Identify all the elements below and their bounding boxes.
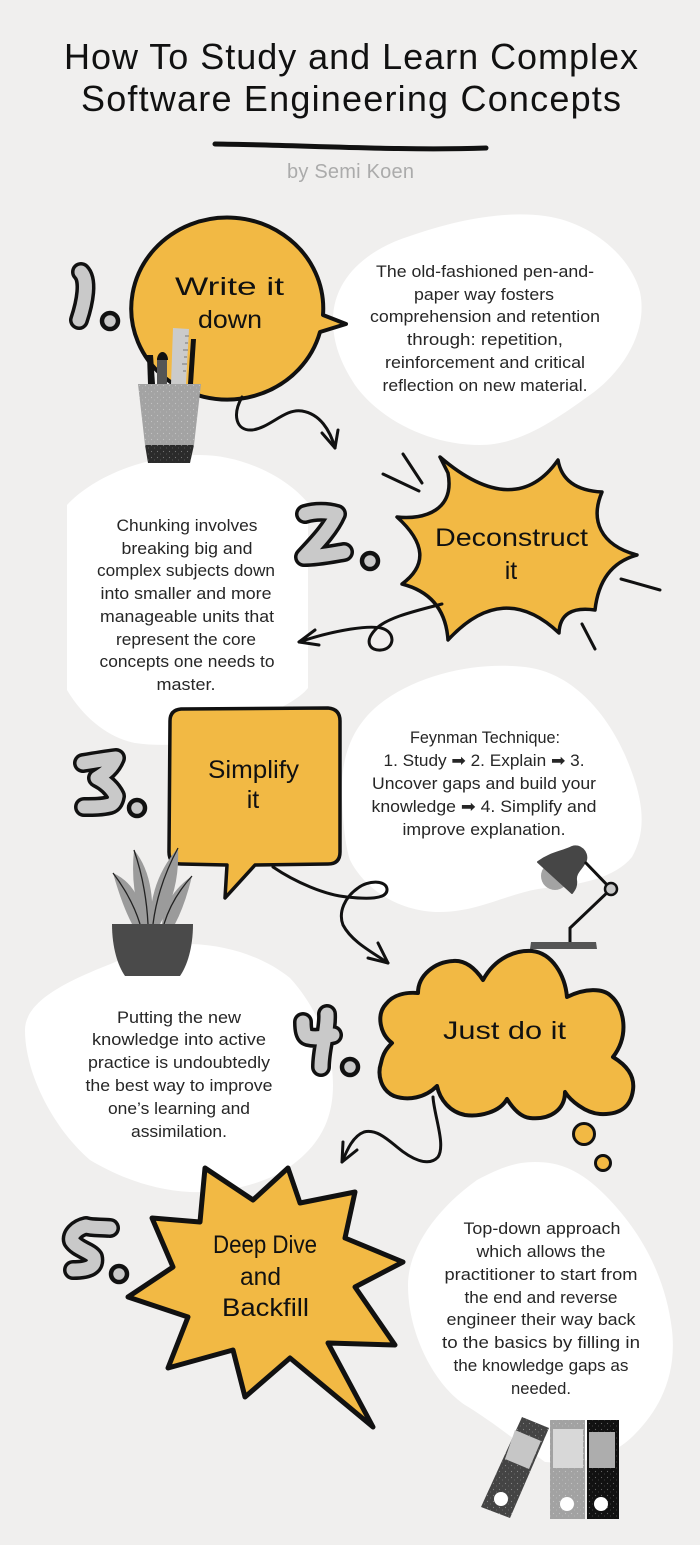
panel: step 4 description: Putting the new — [117, 1009, 241, 1027]
number 2 — [304, 512, 378, 569]
panel: step 5 description: to the basics by filling in — [442, 1334, 640, 1352]
arrow: step 2 to 3 — [299, 604, 442, 650]
panel: step 3 description: improve explanation. — [402, 821, 566, 839]
burst bubble: deconstruct it: Deconstruct — [435, 524, 588, 552]
panel: step 1 description: comprehension and retention — [370, 308, 600, 326]
panel: step 2 description: complex subjects down — [97, 562, 275, 580]
arrow: step 3 to 4 — [273, 867, 388, 963]
icon: desk lamp — [530, 846, 617, 949]
icon: pen holder — [138, 328, 201, 463]
speech bubble: write it down: Write it — [175, 273, 284, 301]
panel: step 2 description: manageable units that — [100, 608, 274, 626]
thought bubble: just do it: Just do it — [443, 1017, 566, 1045]
panel: step 4 description: practice is undoubtedly — [88, 1054, 271, 1072]
arrow: step 1 to 2 — [237, 397, 338, 448]
panel: step 5 description: which allows the — [475, 1243, 606, 1261]
speech bubble: simplify it: it — [247, 786, 259, 814]
star bubble: deep dive and backfill: Backfill — [222, 1294, 309, 1322]
burst bubble: deconstruct it: it — [505, 557, 517, 585]
panel: step 4 description: the best way to improve — [86, 1077, 272, 1095]
panel: step 3 description: Feynman Technique: — [410, 729, 560, 747]
panel: step 2 description: represent the core — [116, 631, 256, 649]
speech bubble: write it down: down — [198, 306, 262, 334]
panel: step 2 description: Chunking involves — [116, 517, 258, 535]
panel: step 2 description: master. — [156, 676, 216, 694]
panel: step 2 description: breaking big and — [122, 540, 252, 558]
number 1 — [79, 272, 118, 329]
speech bubble: write it down — [131, 218, 346, 400]
speech bubble: simplify it: Simplify — [208, 756, 300, 784]
speech bubble: simplify it — [169, 708, 340, 898]
panel: step 1 description: reflection on new material. — [382, 377, 588, 395]
panel: step 1 description: paper way fosters — [414, 286, 554, 304]
thought dots — [574, 1124, 610, 1170]
panel: step 3 description: knowledge ➡ 4. Simplify and — [372, 798, 596, 816]
panel: step 3 description: Uncover gaps and build your — [372, 775, 597, 793]
arrow: step 4 to 5 — [342, 1097, 441, 1162]
panel: step 4 description: knowledge into active — [92, 1031, 266, 1049]
panel: step 2 description: into smaller and more — [100, 585, 272, 603]
star bubble: deep dive and backfill: and — [240, 1263, 281, 1291]
burst lines — [383, 454, 660, 649]
panel: step 5 description: engineer their way back — [446, 1311, 636, 1329]
star bubble: deep dive and backfill: Deep Dive — [213, 1231, 317, 1259]
panel: step 5 description: Top-down approach — [464, 1220, 620, 1238]
panel: step 2 description — [67, 455, 308, 745]
title — [64, 36, 638, 119]
title: Software Engineering Concepts — [81, 78, 621, 119]
number 4 — [303, 1014, 358, 1075]
panel: step 3 description — [342, 666, 642, 912]
panel: step 4 description: assimilation. — [131, 1123, 227, 1141]
title: How To Study and Learn Complex — [64, 36, 638, 77]
thought bubble: just do it — [380, 951, 633, 1118]
number 3 — [83, 758, 145, 816]
panel: step 5 description: the end and reverse — [464, 1289, 618, 1307]
panel: step 1 description: reinforcement and critical — [385, 354, 585, 372]
panel: step 5 description: needed. — [511, 1380, 571, 1398]
panel: step 5 description — [408, 1162, 673, 1463]
star bubble: deep dive and backfill — [128, 1168, 403, 1427]
panel: step 1 description: The old-fashioned pen-and- — [376, 263, 594, 281]
panel: step 5 description: practitioner to start from — [444, 1266, 638, 1284]
panel: step 4 description — [25, 944, 333, 1192]
number 5 — [72, 1226, 127, 1282]
panel: step 3 description: 1. Study ➡ 2. Explain ➡ 3. — [384, 752, 584, 770]
panel: step 2 description: concepts one needs to — [100, 653, 274, 671]
panel: step 5 description: the knowledge gaps as — [454, 1357, 628, 1375]
icon: binders — [481, 1417, 619, 1519]
panel: step 1 description: through: repetition, — [407, 331, 563, 349]
title underline — [215, 144, 486, 149]
burst bubble: deconstruct it — [397, 457, 637, 640]
panel: step 4 description: one’s learning and — [108, 1100, 250, 1118]
icon: potted plant — [112, 848, 193, 976]
byline: by Semi Koen — [287, 161, 414, 183]
panel: step 1 description — [333, 214, 642, 445]
